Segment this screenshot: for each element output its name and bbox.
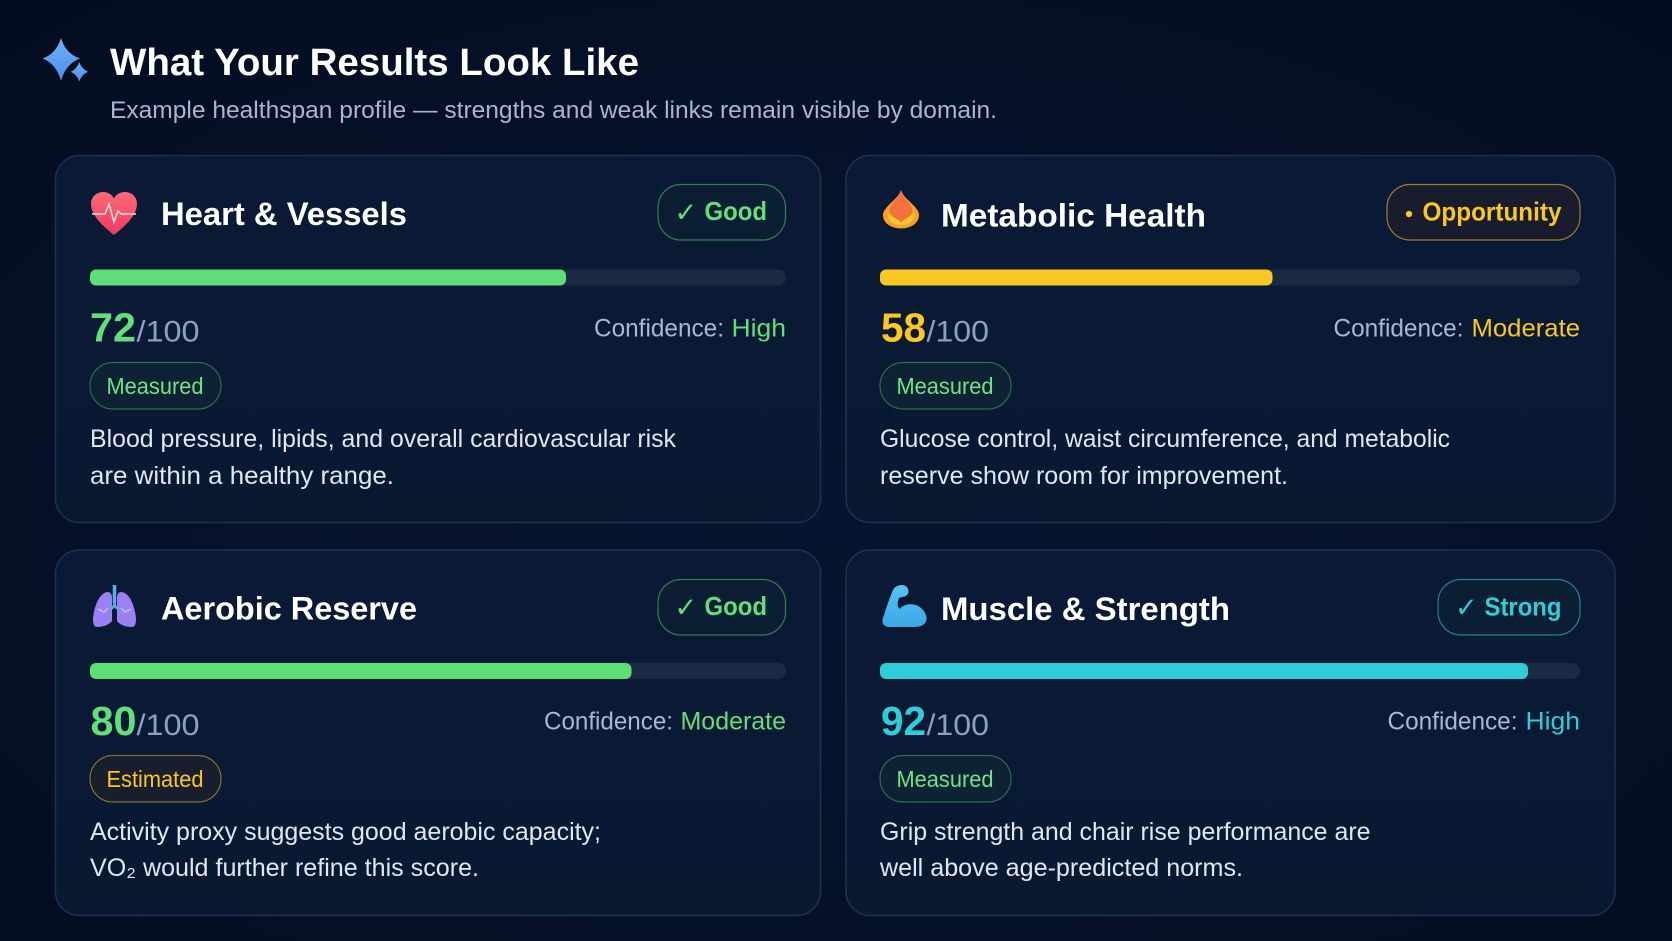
evidence tag: Measured [90,362,221,409]
status badge: Good: Good [704,196,767,226]
evidence tag: Measured: Measured [896,766,994,792]
description: well above age-predicted norms. [879,854,1243,882]
score: 92 [881,698,926,744]
score [90,304,200,350]
score [881,304,989,350]
evidence tag: Estimated: Estimated [106,766,204,792]
icon: heart with pulse [91,192,137,235]
panel: Muscle & Strength [846,550,1615,916]
progress bar: 92 [880,663,1580,679]
description: VO₂ would further refine this score. [90,854,479,882]
icon: flame [883,190,919,228]
score: 72 [90,304,136,350]
description: Glucose control, waist circumference, and metabolic [880,425,1450,453]
score: /100 [926,316,989,348]
heading: Metabolic Health [941,198,1206,234]
status badge: Good: ✓ [674,592,697,624]
confidence [544,708,786,736]
heading: Heart & Vessels [161,196,407,232]
description [90,818,601,882]
description: Blood pressure, lipids, and overall cardiovascular risk [90,425,676,453]
confidence: Confidence: [1334,314,1464,342]
confidence: High [732,314,786,342]
status badge: Strong [1438,580,1580,635]
status badge: Opportunity [1387,184,1580,240]
progress bar: 72 [90,270,786,286]
score: /100 [136,709,200,742]
status badge: Strong: ✓ [1455,592,1478,624]
confidence: Confidence: [594,314,724,342]
status badge: Good [658,580,786,635]
description: Activity proxy suggests good aerobic capacity; [90,818,601,846]
icon: sparkles [42,38,88,82]
subtitle: Example healthspan profile — strengths and weak links remain visible by domain. [110,97,997,124]
confidence [1388,708,1580,736]
score [90,698,200,744]
score: 58 [881,304,926,350]
score: 80 [90,698,136,744]
progress bar: 80 [90,663,786,679]
status badge: Good: Good [704,591,767,621]
confidence [594,314,786,342]
heading: Muscle & Strength [941,591,1230,627]
evidence tag: Estimated [90,756,221,802]
confidence: Confidence: [1388,708,1518,736]
confidence: High [1526,708,1580,736]
description: Grip strength and chair rise performance are [880,818,1370,846]
score: /100 [136,316,200,348]
description: are within a healthy range. [90,462,394,490]
evidence tag: Measured [880,362,1011,409]
description: reserve show room for improvement. [880,462,1288,490]
confidence: Moderate [1472,314,1580,342]
score: /100 [926,709,989,742]
evidence tag: Measured: Measured [106,373,204,399]
panel: Metabolic Health [846,156,1615,522]
progress bar: 58 [880,270,1580,286]
icon: flexed arm [882,585,927,627]
status badge: Opportunity: Opportunity [1422,196,1562,226]
status badge: Good [658,184,786,240]
panel: Aerobic Reserve [56,550,820,916]
status badge: Strong: Strong [1484,592,1562,622]
score [881,698,989,744]
confidence: Confidence: [544,708,673,736]
confidence: Moderate [680,708,786,736]
status badge: Good: ✓ [674,198,697,228]
evidence tag: Measured: Measured [896,373,994,399]
title: What Your Results Look Like [110,42,639,84]
description [880,425,1450,490]
description [879,818,1370,882]
panel: Heart & Vessels [56,156,820,522]
evidence tag: Measured [880,756,1011,802]
icon: lungs [93,585,136,627]
description [90,425,676,490]
heading: Aerobic Reserve [161,590,417,626]
confidence [1334,314,1580,342]
